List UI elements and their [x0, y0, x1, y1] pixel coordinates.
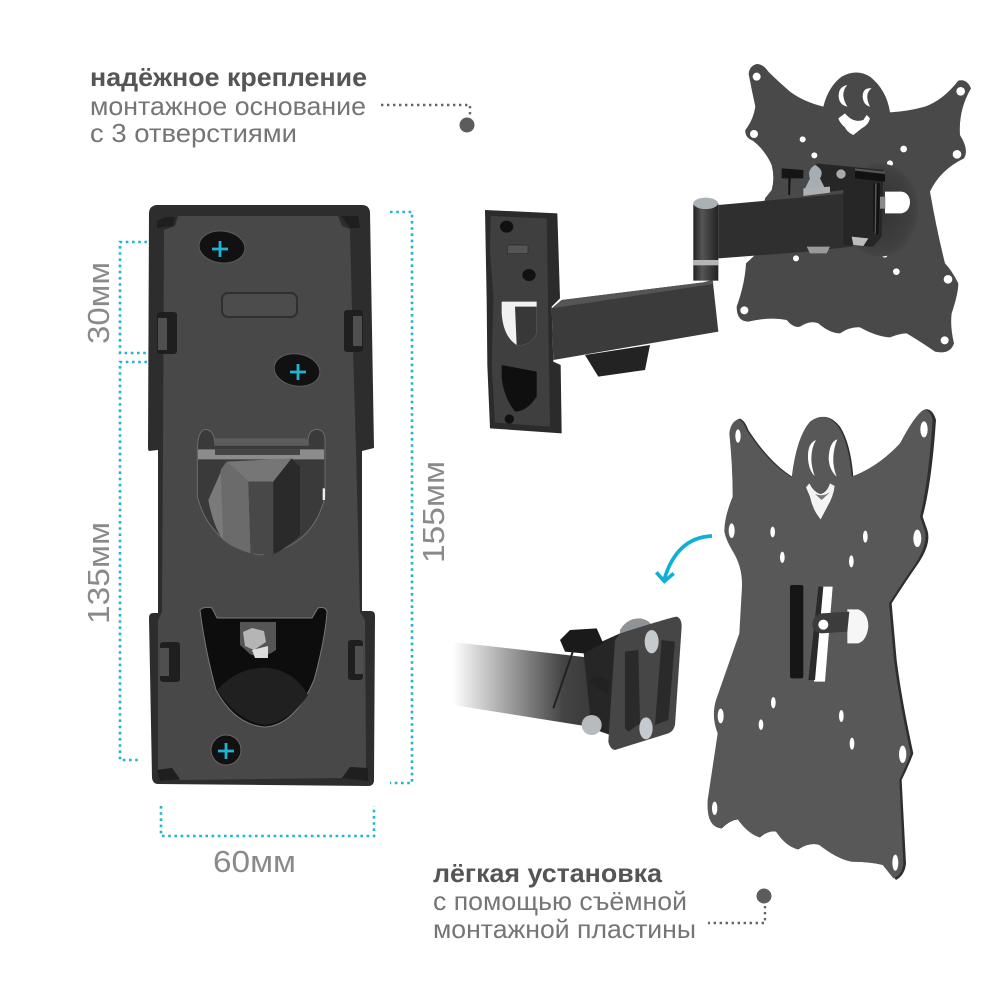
detail: fading arm — [453, 642, 610, 730]
top plate — [737, 64, 971, 352]
wall plate: upper oval hole — [197, 229, 247, 265]
screw marks: cyan plus signs — [212, 241, 306, 759]
dimension: 30 mm: 30мм — [81, 262, 116, 344]
callout pointer: removable plate — [708, 888, 772, 923]
text block: reliable mounting — [90, 62, 367, 148]
upper arm — [718, 193, 852, 258]
lower swivel foot — [585, 345, 650, 377]
pivot cylinder — [693, 198, 718, 281]
dimension: 155 mm — [390, 212, 451, 783]
dimension: 60 mm — [161, 806, 374, 879]
small wall plate — [485, 210, 562, 433]
top plate: mounting holes — [740, 73, 965, 344]
wall plate: upper window with pivot — [197, 429, 325, 555]
top plate: ghost face — [838, 85, 872, 135]
text block: reliable mounting: надёжное крепление — [90, 62, 367, 92]
tilt joint — [782, 163, 885, 253]
lower arm — [552, 280, 718, 360]
wall plate: corner tabs and side clips — [157, 216, 368, 781]
wall plate: bottom round hole — [211, 735, 241, 765]
swing-out plate — [707, 409, 936, 880]
wall plate close-up — [148, 205, 375, 786]
dimension: 60 mm: 60мм — [213, 844, 296, 879]
dimension: 155 mm: 155мм — [416, 461, 451, 563]
full bracket product photo — [485, 64, 971, 433]
dimension: 30 mm — [81, 242, 147, 353]
wall plate: lower window with bolt — [200, 607, 327, 727]
swing-out plate: central slots and hook — [790, 585, 868, 682]
top plate: soft shadow and white slot — [842, 163, 918, 257]
text block: easy installation — [433, 858, 696, 944]
swing-out plate: mounting holes — [712, 421, 928, 871]
callout pointer: mounting base — [381, 105, 474, 132]
text block: easy installation: лёгкая установка — [433, 858, 663, 888]
text block: easy installation: с помощью съёмной — [433, 886, 687, 916]
text block: reliable mounting: с 3 отверстиями — [90, 118, 297, 148]
dimension: 135 mm: 135мм — [81, 522, 116, 624]
wall plate: lower oval hole — [272, 350, 322, 390]
swing-out plate: ghost face — [806, 439, 837, 519]
curved arrow — [656, 536, 712, 581]
text block: reliable mounting: монтажное основание — [90, 91, 366, 121]
detachable bracket detail — [453, 617, 682, 750]
wall plate: embossed slot — [222, 293, 297, 317]
dimension: 135 mm — [81, 362, 147, 760]
text block: easy installation: монтажной пластины — [433, 914, 696, 944]
detail: clamp and plate — [553, 617, 682, 750]
